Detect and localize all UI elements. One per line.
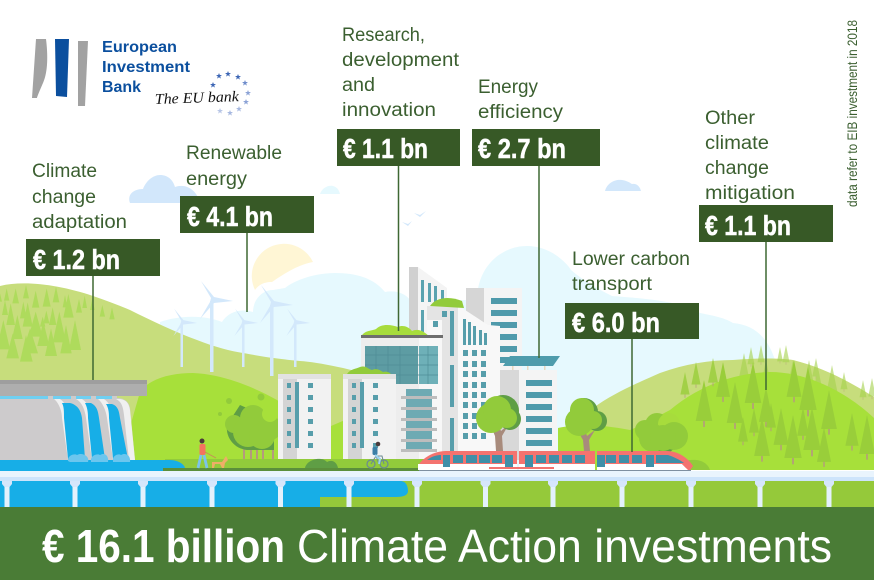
bottom banner (0, 507, 874, 580)
category: energy efficiency: Energy (478, 77, 538, 98)
category: renewable energy: Renewable (186, 143, 282, 164)
category: energy efficiency: € 2.7 bn (478, 133, 566, 164)
bottom banner: € 16.1 billion (42, 520, 285, 572)
logo (32, 39, 251, 116)
category: climate change adaptation: Climate (32, 161, 97, 182)
pale forest tips: right hill (737, 345, 874, 406)
category: research, development and innovation: development (342, 50, 460, 71)
train (418, 451, 693, 472)
category: lower carbon transport: transport (572, 274, 653, 295)
building: central with glass front (361, 325, 443, 460)
category: climate change adaptation: € 1.2 bn (33, 244, 120, 275)
building: right with solar panel (500, 356, 560, 460)
category: research, development and innovation (337, 25, 460, 166)
logo: three pillars (32, 39, 88, 106)
cloud: upper right (605, 180, 641, 191)
logo: wordmark: Investment (102, 59, 191, 76)
logo: tagline: The EU bank (155, 89, 239, 108)
category: other climate change mitigation: € 1.1 bn (705, 210, 791, 241)
category: other climate change mitigation: mitigation (705, 183, 795, 204)
back hill left (0, 283, 420, 470)
category: research, development and innovation: innovation (342, 100, 436, 121)
background cloud right (477, 246, 775, 470)
wind turbines (173, 281, 310, 376)
category: other climate change mitigation (699, 108, 833, 242)
building: central slanted tower (427, 298, 500, 459)
category: climate change adaptation: adaptation (32, 212, 127, 233)
logo: EU stars (210, 71, 251, 116)
category: renewable energy (180, 143, 314, 233)
category: renewable energy: € 4.1 bn (187, 201, 273, 232)
building: tall back tower (409, 267, 447, 350)
cloud: upper left (129, 175, 200, 203)
birds (402, 211, 426, 226)
category: research, development and innovation: and (342, 75, 375, 96)
logo: wordmark (102, 39, 191, 96)
tree: central (476, 395, 521, 451)
category: other climate change mitigation: Other (705, 108, 756, 129)
logo: wordmark: European (102, 39, 177, 56)
bush: right of transport line (635, 413, 710, 470)
category: climate change adaptation: change (32, 187, 96, 208)
category: energy efficiency: efficiency (478, 102, 564, 123)
building: back right office (466, 288, 522, 378)
logo: wordmark: Bank (102, 79, 141, 96)
cloud behind wind turbines (160, 273, 480, 400)
park trees behind buildings (218, 394, 282, 460)
leader lines (93, 165, 766, 452)
forest: left hill (0, 285, 115, 362)
category: research, development and innovation: Research, (342, 25, 425, 46)
bottom banner: Climate Action investments (297, 520, 832, 572)
category: lower carbon transport: € 6.0 bn (572, 307, 660, 338)
category: research, development and innovation: € 1.1 bn (343, 133, 428, 164)
category: lower carbon transport: Lower carbon (572, 249, 690, 270)
category: lower carbon transport (565, 249, 699, 339)
category: climate change adaptation (26, 161, 160, 276)
front hill right (558, 372, 874, 470)
water under dam (0, 460, 185, 471)
forest: right hill (680, 358, 874, 467)
category: renewable energy: energy (186, 169, 248, 190)
cyclist (367, 442, 388, 468)
building: small centre (343, 366, 396, 459)
hydro dam (0, 380, 147, 462)
sun (252, 244, 313, 290)
front hill left (120, 373, 345, 462)
person walking dog (198, 438, 228, 468)
category: energy efficiency (472, 77, 600, 166)
tree: right of centre (565, 398, 607, 451)
cloud: small centre (320, 186, 340, 194)
building: small left (278, 374, 331, 459)
back hill right (585, 358, 874, 470)
category: other climate change mitigation: change (705, 158, 769, 179)
elevated bridge and water (0, 471, 874, 507)
ground strip (163, 459, 425, 471)
category: other climate change mitigation: climate (705, 133, 769, 154)
